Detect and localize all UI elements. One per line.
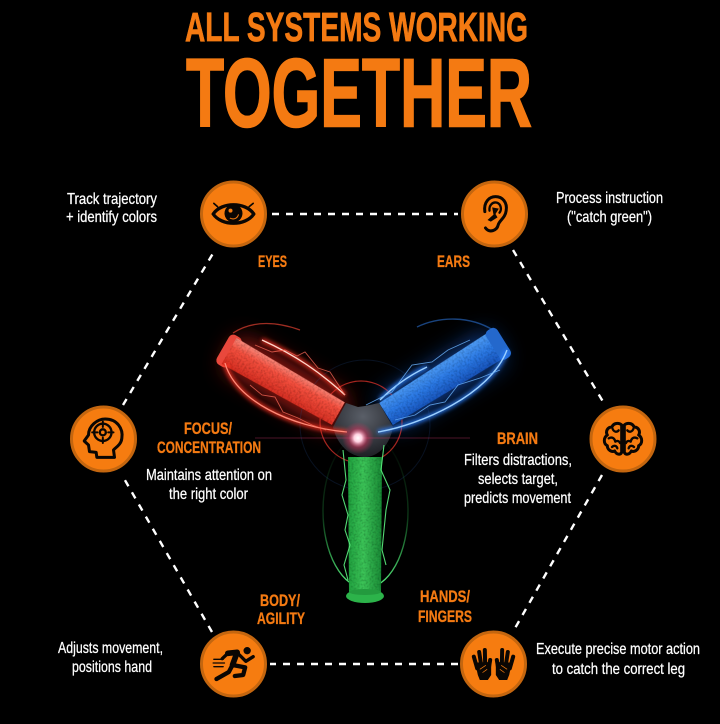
hub (333, 403, 393, 457)
label: EYES (258, 253, 287, 271)
heading line 2: CONCENTRATION (157, 439, 261, 457)
node: brain (464, 407, 655, 507)
heading: BRAIN (497, 430, 538, 448)
heading: HANDS/ (420, 588, 470, 606)
heading line 2: FINGERS (418, 608, 472, 626)
text: body description (58, 640, 163, 676)
energy arcs: red (225, 324, 347, 432)
heading: FOCUS/ (184, 420, 232, 438)
icon: ear (485, 197, 506, 231)
title line 2: TOGETHER (186, 38, 532, 148)
node: hands (418, 588, 526, 696)
glow: blue (388, 346, 496, 414)
text: eyes description: + identify colors (66, 209, 157, 226)
description line 2: selects target, (478, 471, 558, 488)
label: EARS (437, 253, 470, 271)
text: body description: Adjusts movement, (58, 640, 163, 657)
node: focus (72, 407, 272, 503)
icon: head with target (84, 419, 122, 457)
badge (591, 407, 655, 471)
red leg (214, 333, 347, 428)
badge (462, 182, 526, 246)
glow: red (232, 352, 340, 415)
text: hands description: to catch the correct leg (552, 661, 685, 678)
energy arcs: green (342, 445, 390, 580)
node: ears (437, 182, 526, 271)
description: Maintains attention on (146, 467, 272, 484)
text: eyes description (66, 191, 157, 226)
text: ears description: ("catch green") (567, 209, 652, 226)
description: Filters distractions, (464, 452, 572, 469)
title line 1: ALL SYSTEMS WORKING (185, 4, 528, 50)
badge (72, 407, 136, 471)
text: ears description (556, 190, 663, 226)
node: body (202, 592, 305, 696)
description line 2: the right color (169, 486, 249, 503)
icon: eye (213, 203, 254, 223)
hub rings (300, 360, 430, 588)
text: hands description (536, 641, 700, 678)
description line 3: predicts movement (464, 490, 571, 507)
lens flare (255, 422, 470, 454)
hexagon of dashed connectors (122, 214, 605, 664)
text: eyes description: Track trajectory (67, 191, 157, 208)
badge (202, 182, 266, 246)
text: body description: positions hand (72, 659, 152, 676)
glow: green (347, 460, 383, 600)
energy arcs: blue (366, 319, 507, 432)
heading: BODY/ (260, 592, 300, 610)
title (185, 4, 532, 148)
badge (202, 632, 266, 696)
green leg (346, 457, 384, 603)
icon: runner (213, 647, 253, 679)
icon: brain (604, 423, 642, 454)
icon: hands (474, 650, 513, 680)
node: eyes (202, 182, 287, 271)
text: ears description: Process instruction (556, 190, 663, 207)
blue leg (377, 326, 513, 428)
central illustration: three glowing legs (214, 319, 513, 603)
heading line 2: AGILITY (257, 610, 305, 628)
badge (462, 632, 526, 696)
